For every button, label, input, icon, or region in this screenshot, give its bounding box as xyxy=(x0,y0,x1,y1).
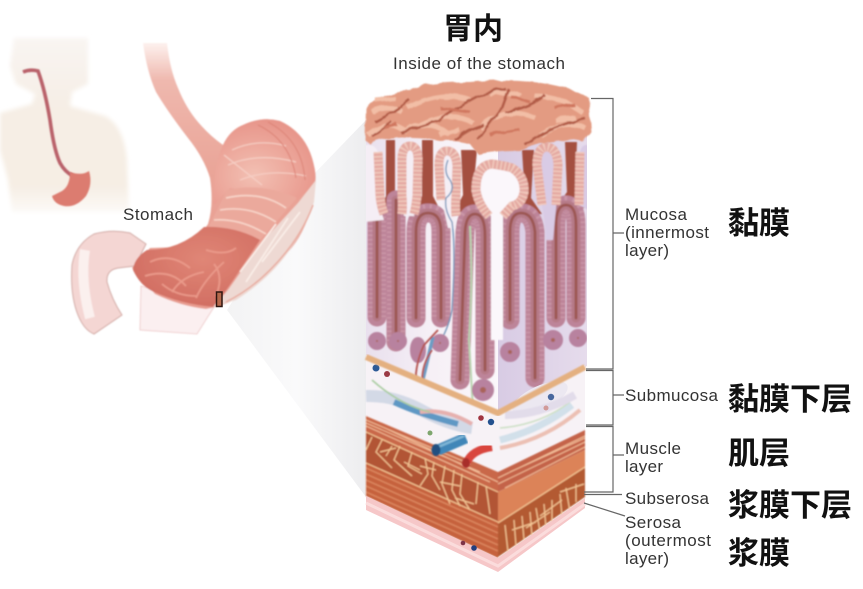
label: mucosa xyxy=(625,205,709,260)
small stomach xyxy=(52,171,90,206)
gland legs: core xyxy=(377,200,576,380)
projection wedge xyxy=(227,120,366,497)
inner cavity xyxy=(133,227,260,307)
serosa layer xyxy=(366,496,585,572)
red vessel tube xyxy=(462,447,492,468)
chinese label: muscle: 肌层 xyxy=(728,436,790,471)
fundus xyxy=(214,119,316,205)
chinese label: subserosa: 浆膜下层 xyxy=(728,488,852,523)
lower cut flap xyxy=(140,286,214,334)
label: muscle layer: layer xyxy=(625,457,663,476)
body silhouette xyxy=(0,38,129,212)
stomach lining surface xyxy=(365,80,591,154)
large stomach xyxy=(72,43,316,334)
serosa vessel dots xyxy=(461,541,477,551)
bracket lines xyxy=(584,98,625,516)
inset: body with digestive tract xyxy=(0,38,129,212)
chinese label: serosa: 浆膜 xyxy=(728,536,790,571)
chinese label: mucosa: 黏膜 xyxy=(728,206,790,241)
label: subserosa: Subserosa xyxy=(625,489,710,508)
mucosa layer xyxy=(362,130,592,420)
muscle layer xyxy=(366,416,585,558)
subtitle: Inside of the stomach xyxy=(393,54,565,73)
label: mucosa: (innermost xyxy=(625,223,709,242)
ascending vessels xyxy=(422,336,435,380)
label: mucosa: layer) xyxy=(625,241,669,260)
orange band xyxy=(366,357,585,413)
stomach outer wall xyxy=(132,43,315,309)
label: stomach: Stomach xyxy=(123,205,193,224)
title: 胃内 xyxy=(443,13,503,46)
label: serosa: Serosa xyxy=(625,513,682,532)
submucosa layer xyxy=(366,355,585,472)
upper inner folds xyxy=(208,187,297,240)
label: serosa: layer) xyxy=(625,549,669,568)
label: serosa xyxy=(625,513,711,568)
dark tissue stems xyxy=(378,140,586,214)
small esophagus xyxy=(23,70,73,176)
label: muscle layer xyxy=(625,439,681,476)
label: muscle layer: Muscle xyxy=(625,439,681,458)
arch lumens xyxy=(362,145,457,228)
blood vessels in villus xyxy=(442,159,456,336)
label: mucosa: Mucosa xyxy=(625,205,688,224)
chinese label: submucosa: 黏膜下层 xyxy=(728,382,852,417)
label: serosa: (outermost xyxy=(625,531,711,550)
submucosa vessels xyxy=(366,396,472,428)
gland legs: cell border xyxy=(377,200,576,380)
muscle cracks xyxy=(366,432,585,552)
gland cross-sections xyxy=(372,333,583,397)
submucosa vessel dots xyxy=(372,364,554,436)
cut wall flap xyxy=(213,180,316,307)
blue vessel tube xyxy=(432,436,466,456)
stomach wall block xyxy=(362,80,592,572)
location marker xyxy=(216,292,222,306)
duodenum xyxy=(72,231,146,334)
label: submucosa: Submucosa xyxy=(625,386,719,405)
arch epithelium xyxy=(378,146,580,216)
